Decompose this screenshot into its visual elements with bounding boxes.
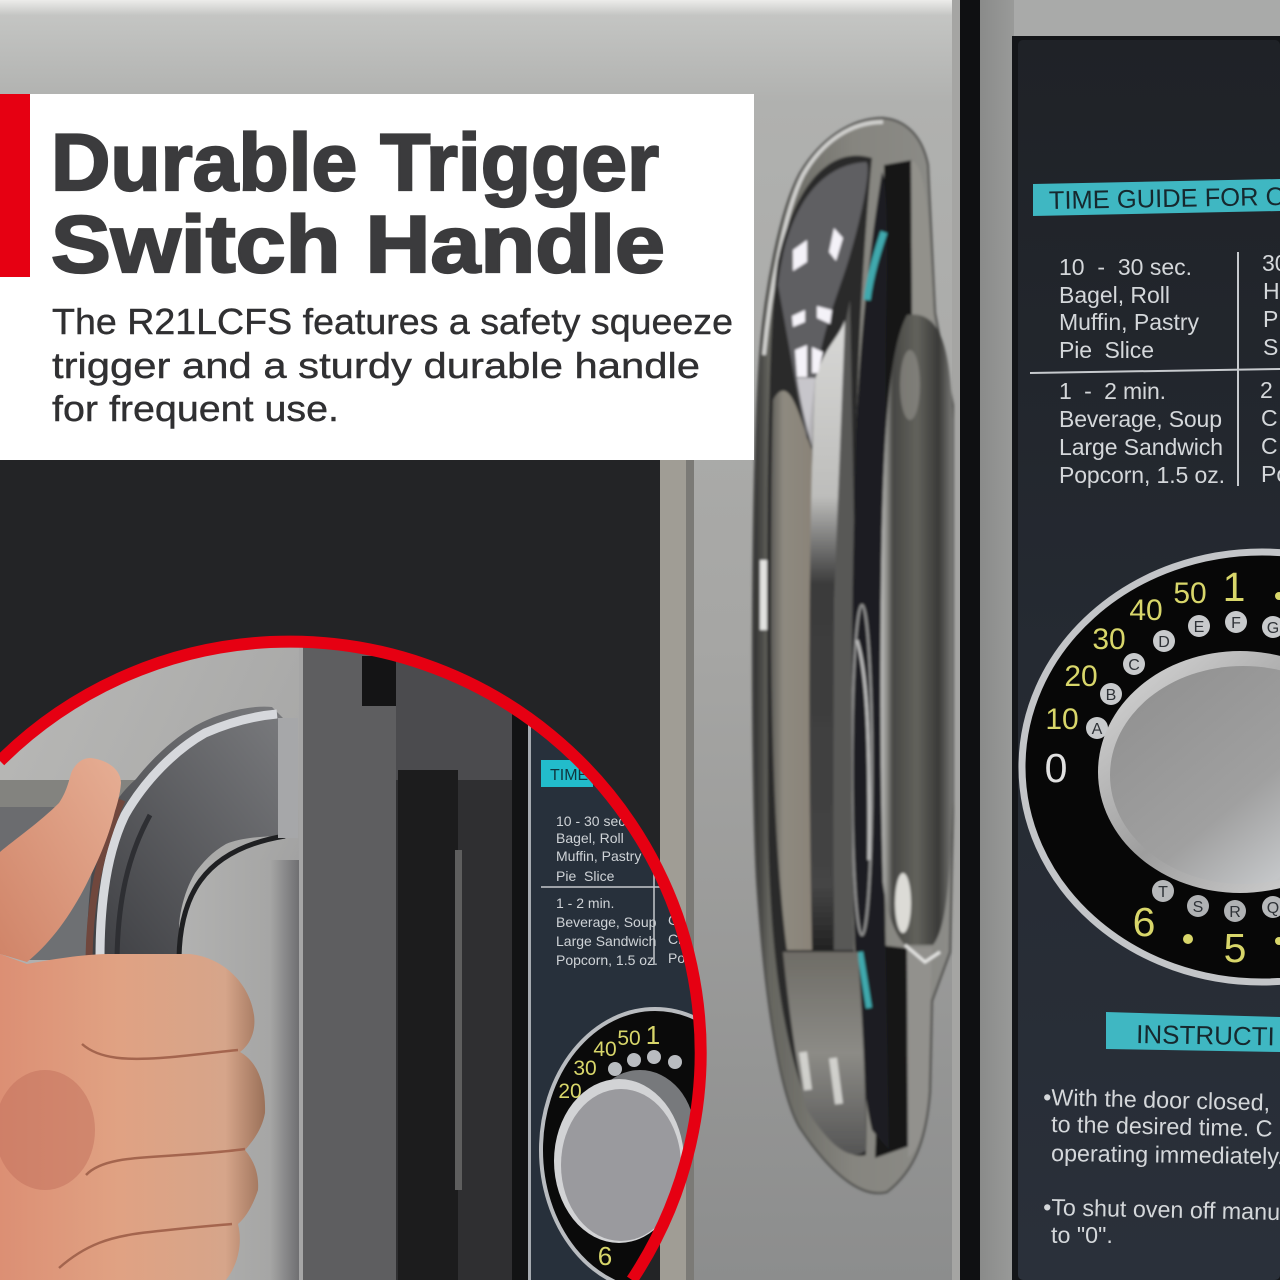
thumb: [0, 758, 121, 962]
inset chrome handle: [86, 707, 285, 958]
cooking time guide table: Pie Slice: [1059, 337, 1154, 363]
instructions text: operating immediately.: [1051, 1140, 1280, 1169]
inset photo: [0, 648, 695, 1280]
description: The R21LCFS features a safety squeeze: [52, 301, 733, 342]
cooking time guide table: Bagel, Roll: [1059, 282, 1170, 308]
dial letter markers: G: [1267, 620, 1279, 637]
dial letter markers: D: [1158, 634, 1170, 651]
inset photo: 1 - 2 min.: [556, 895, 614, 911]
handle mounting plate: [753, 118, 953, 1193]
cooking time guide table: Beverage, Soup: [1059, 406, 1222, 432]
cooking time guide table: P: [1263, 306, 1278, 332]
inset photo: Popcorn, 1.5 oz.: [556, 952, 658, 968]
inset dial: [539, 1007, 695, 1280]
timer knob: [1098, 651, 1280, 893]
finger creases: [59, 1044, 245, 1268]
squeeze trigger: [881, 315, 953, 945]
inset photo: Beverage, Soup: [556, 914, 657, 930]
inset photo: Bagel, Roll: [556, 830, 624, 846]
cooking time guide table: Muffin, Pastry: [1059, 309, 1200, 335]
control panel: [1018, 40, 1280, 1280]
grip top bulb: [778, 162, 868, 440]
cooking time guide table: [1030, 250, 1280, 488]
grip gray band: [830, 300, 854, 950]
dial letter markers: B: [1106, 687, 1116, 704]
inset hand: [0, 758, 265, 1280]
chrome column: [809, 320, 845, 950]
dial minute numbers: 30: [1092, 623, 1126, 656]
title: Switch Handle: [51, 200, 665, 290]
description: trigger and a sturdy durable handle: [52, 345, 700, 386]
dial letter markers: C: [1128, 657, 1140, 674]
grip side face: [771, 391, 812, 950]
cooking time guide table: 10 - 30 sec.: [1059, 254, 1192, 280]
red accent bar: [0, 94, 30, 277]
instructions text: [1043, 1084, 1280, 1248]
steel shoulder: [911, 160, 934, 320]
chrome mount plate: [278, 718, 286, 838]
dial letter markers: F: [1231, 615, 1241, 632]
instructions text: to "0".: [1051, 1222, 1113, 1248]
cooking time guide label: TIME GUIDE FOR O: [1049, 183, 1280, 215]
instructions label: [1106, 1012, 1280, 1052]
inset photo: Pop: [668, 950, 693, 966]
inset photo: 1: [646, 1020, 660, 1050]
inset circle: hand squeezing trigger: [0, 640, 769, 1280]
inset photo: 50: [617, 1027, 641, 1050]
cooking time guide table: C: [1261, 433, 1278, 459]
cooking time guide table: Large Sandwich: [1059, 434, 1223, 460]
inset control panel: [512, 714, 528, 1280]
inset photo: TIME: [550, 767, 588, 784]
dial minute numbers: 0: [1045, 745, 1067, 791]
instructions text: •With the door closed,: [1043, 1084, 1270, 1116]
reflected control panel: [851, 172, 889, 1150]
title panel: [0, 94, 754, 460]
inset photo: Cl: [668, 931, 681, 947]
inset photo: Muffin, Pastry: [556, 848, 641, 864]
cooking time guide table: 2: [1260, 377, 1273, 403]
dial letter markers: Q: [1267, 900, 1279, 917]
inset photo: 20: [558, 1080, 582, 1103]
cooking time guide table: S: [1263, 334, 1278, 360]
handle lower bend: [783, 952, 866, 1154]
instructions label: INSTRUCTI: [1136, 1019, 1275, 1051]
dial minute numbers: 40: [1129, 594, 1163, 627]
description: for frequent use.: [52, 388, 339, 429]
inset door frame: [299, 640, 397, 1280]
inset photo: Large Sandwich: [556, 933, 656, 949]
chrome highlights: [792, 228, 843, 447]
grip silhouette: [767, 156, 872, 1156]
dial minute numbers: 6: [1133, 899, 1155, 945]
dial letter markers: A: [1092, 721, 1103, 738]
title: Durable Trigger: [51, 118, 659, 208]
fingers and palm: [0, 954, 265, 1280]
dial letter markers: R: [1229, 904, 1241, 921]
cooking time guide table: H: [1263, 278, 1280, 304]
inset photo: 40: [593, 1038, 617, 1061]
dial minute numbers: [1045, 564, 1246, 971]
inset photo: C: [668, 912, 678, 928]
title: [51, 118, 665, 290]
timer dial: [1022, 552, 1280, 982]
inset photo: 10 - 30 sec: [556, 813, 625, 829]
dial minute numbers: 10: [1045, 703, 1079, 736]
door handle with trigger: [753, 118, 953, 1193]
knuckle redness: [0, 1070, 95, 1190]
inset photo: 30: [573, 1057, 597, 1080]
dial minute numbers: 1: [1223, 564, 1245, 610]
chrome left edge: [100, 714, 277, 958]
dial minute numbers: 5: [1224, 925, 1246, 971]
dial minute numbers: 50: [1173, 577, 1207, 610]
instructions text: to the desired time. C: [1051, 1111, 1273, 1142]
cooking time guide table: 1 - 2 min.: [1059, 378, 1166, 404]
cooking time guide table: C: [1261, 405, 1278, 431]
dial letter markers: E: [1194, 619, 1204, 636]
recess behind grip: [875, 160, 922, 1158]
description: [52, 301, 733, 429]
inset photo: Pie Slice: [556, 868, 615, 884]
inset red ring: [0, 642, 701, 1280]
handle chrome rim: [764, 122, 883, 355]
dial letter markers: S: [1193, 899, 1203, 916]
cooking time guide table: Popcorn, 1.5 oz.: [1059, 462, 1225, 488]
inset photo: 6: [598, 1241, 612, 1271]
dial letter markers: T: [1158, 884, 1168, 901]
dial letter markers: [1086, 592, 1280, 945]
dial minute numbers: 20: [1064, 660, 1098, 693]
